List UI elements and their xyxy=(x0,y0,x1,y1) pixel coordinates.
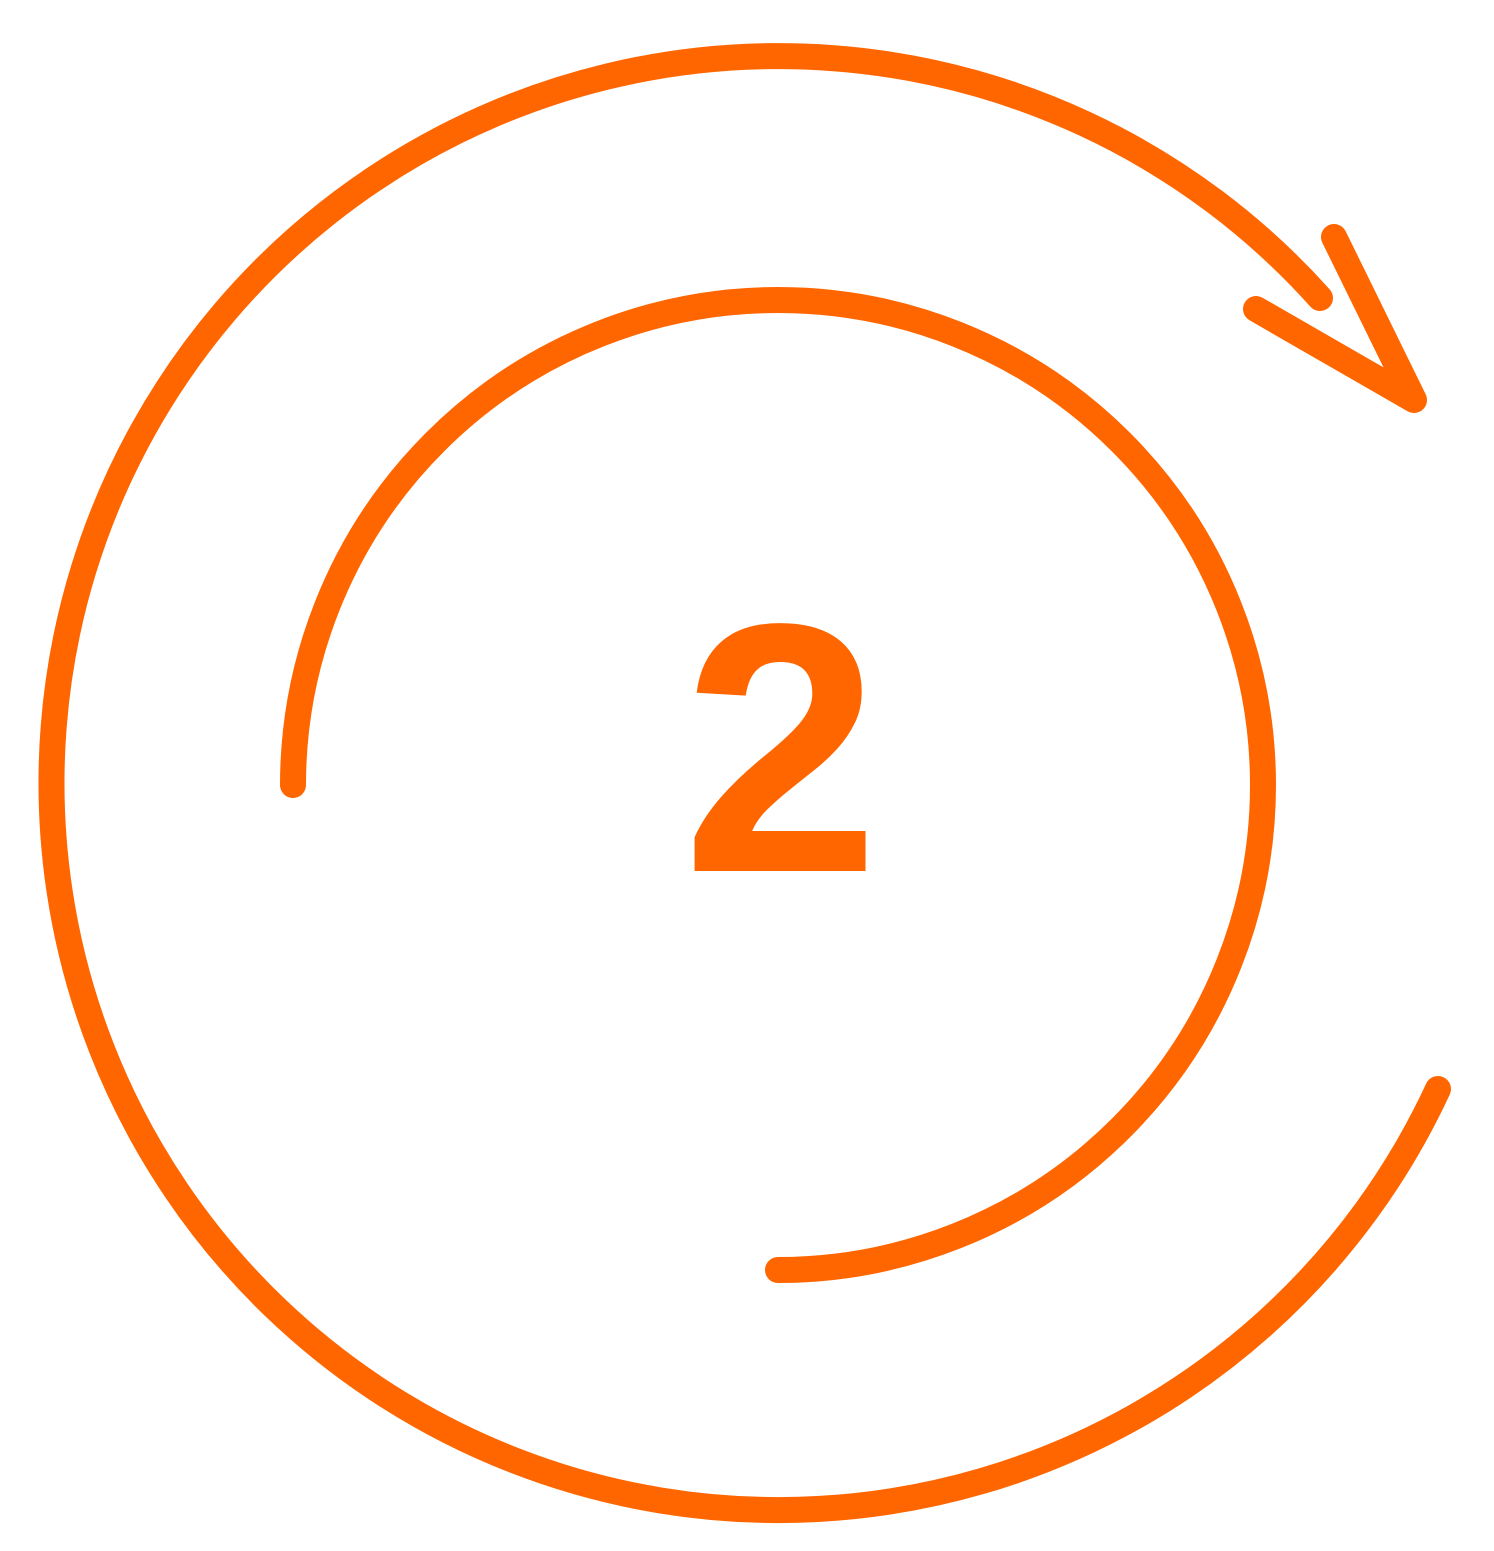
icon: arrowhead xyxy=(1256,237,1414,400)
number 2: 2 xyxy=(682,551,880,947)
inner arc xyxy=(293,300,1263,1270)
